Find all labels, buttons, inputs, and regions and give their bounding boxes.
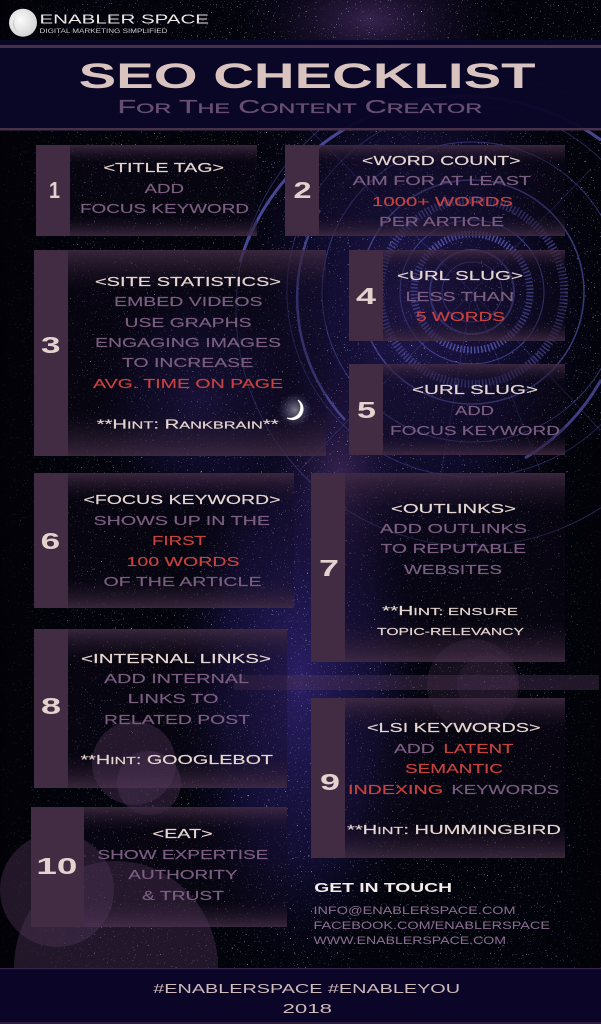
contact heading: GET IN TOUCH <box>314 880 452 895</box>
panel: 4 url slug: <URL SLUG> <box>397 268 523 283</box>
panel: 1 title tag: FOCUS KEYWORD <box>80 201 249 216</box>
panel: 9 lsi keywords: <LSI KEYWORDS> <box>367 720 540 735</box>
panel: 10 eat: AUTHORITY <box>128 867 238 882</box>
panel: 5 url slug: FOCUS KEYWORD <box>390 423 560 438</box>
panel: 9 lsi keywords: SEMANTIC <box>405 761 503 776</box>
brand name: ENABLER SPACE <box>40 12 209 26</box>
panel: 8 internal links: ADD INTERNAL <box>104 671 249 686</box>
panel: 2 word count: AIM FOR AT LEAST <box>353 173 531 188</box>
panel: 4 url slug: 4 <box>356 283 376 309</box>
panel: 9 lsi keywords: **H INT : HUMMINGBIRD <box>347 822 561 837</box>
panel: 7 outlinks: **H INT: ENSURE <box>382 603 518 618</box>
panel: 6 focus keyword: 100 WORDS <box>126 554 240 569</box>
panel: 7 outlinks <box>311 473 565 662</box>
panel: 9 lsi keywords: LATENT <box>444 741 514 756</box>
HUD concentric rings decoration <box>236 74 601 546</box>
panel: 10 eat: <EAT> <box>152 826 213 841</box>
panel: 7 outlinks: 7 <box>319 555 339 581</box>
panel: 9 lsi keywords: KEYWORDS <box>452 782 559 797</box>
subtitle: F OR T HE C ONTENT C REATOR <box>118 97 482 117</box>
panel: 3 site statistics: <SITE STATISTICS> <box>95 274 281 289</box>
panel: 3 site statistics: **H INT : R ANKBRAIN ** <box>97 417 279 432</box>
panel: 6 focus keyword: SHOWS UP IN THE <box>94 513 270 528</box>
header band <box>0 40 601 130</box>
panel: 2 word count: 2 <box>294 177 312 203</box>
panel: 6 focus keyword: <FOCUS KEYWORD> <box>84 492 280 507</box>
panel: 2 word count <box>285 145 565 236</box>
panel: 3 site statistics: ENGAGING IMAGES <box>95 335 281 350</box>
panel: 9 lsi keywords <box>311 698 565 858</box>
tagline: DIGITAL MARKETING SIMPLIFIED <box>40 28 168 35</box>
panel: 8 internal links: **H INT : GOOGLEBOT <box>80 752 273 767</box>
panel: 4 url slug: 5 WORDS <box>416 309 505 324</box>
panel: 2 word count: PER ARTICLE <box>379 214 504 229</box>
title: SEO CHECKLIST <box>79 57 536 96</box>
panel: 7 outlinks: TOPIC-RELEVANCY <box>377 626 524 638</box>
decorative translucent bar and circles <box>234 639 599 731</box>
panel: 5 url slug <box>349 364 565 455</box>
panel: 5 url slug: 5 <box>357 397 376 423</box>
panel: 3 site statistics: 3 <box>41 332 60 358</box>
panel: 3 site statistics: EMBED VIDEOS <box>114 294 263 309</box>
panel: 7 outlinks: ADD OUTLINKS <box>380 521 527 536</box>
panel: 2 word count: <WORD COUNT> <box>362 153 520 168</box>
panel: 8 internal links: 8 <box>41 693 61 719</box>
panel: 3 site statistics <box>34 250 326 456</box>
panel: 1 title tag: 1 <box>49 177 60 203</box>
contact block <box>314 880 550 947</box>
panel: 9 lsi keywords: ADD <box>394 741 435 756</box>
panel: 1 title tag <box>36 145 257 236</box>
panel: 8 internal links: RELATED POST <box>104 712 250 727</box>
panel: 6 focus keyword: 6 <box>41 528 60 554</box>
panel: 10 eat: SHOW EXPERTISE <box>97 847 269 862</box>
panel: 4 url slug: LESS THAN <box>406 289 514 304</box>
panel: 8 internal links <box>34 629 287 815</box>
panel: 7 outlinks: WEBSITES <box>404 562 502 577</box>
panel: 10 eat: & TRUST <box>142 888 224 903</box>
panel: 5 url slug: <URL SLUG> <box>412 382 538 397</box>
panel: 7 outlinks: TO REPUTABLE <box>381 541 526 556</box>
panel: 5 url slug: ADD <box>455 403 494 418</box>
panel: 8 internal links: <INTERNAL LINKS> <box>81 651 271 666</box>
panel: 2 word count: 1000+ WORDS <box>372 194 514 209</box>
panel: 4 url slug <box>349 250 565 341</box>
panel: 6 focus keyword: OF THE ARTICLE <box>104 574 262 589</box>
footer band <box>0 968 601 1024</box>
year: 2018 <box>282 1001 332 1016</box>
panel: 10 eat: 10 <box>36 853 77 879</box>
panel: 1 title tag: <TITLE TAG> <box>104 160 224 175</box>
panel: 9 lsi keywords: INDEXING <box>348 782 443 797</box>
panel: 6 focus keyword <box>34 473 294 608</box>
panel: 3 site statistics: TO INCREASE <box>122 355 253 370</box>
icon: moon logo <box>9 9 37 37</box>
panel: 6 focus keyword: FIRST <box>152 533 206 548</box>
panel: 3 site statistics: AVG. TIME ON PAGE <box>93 376 283 391</box>
logo <box>9 9 209 37</box>
icon: crescent moon <box>278 393 312 427</box>
hashtags: #ENABLERSPACE #ENABLEYOU <box>153 981 460 996</box>
panel: 7 outlinks: <OUTLINKS> <box>391 501 516 516</box>
panel: 3 site statistics: USE GRAPHS <box>124 315 252 330</box>
website: WWW.ENABLERSPACE.COM <box>314 935 506 947</box>
facebook: FACEBOOK.COM/ENABLERSPACE <box>314 920 550 932</box>
panel: 9 lsi keywords: 9 <box>320 769 340 795</box>
panel: 10 eat <box>0 807 287 968</box>
email: INFO@ENABLERSPACE.COM <box>314 905 516 917</box>
panel: 1 title tag: ADD <box>144 181 184 196</box>
panel: 8 internal links: LINKS TO <box>128 691 219 706</box>
